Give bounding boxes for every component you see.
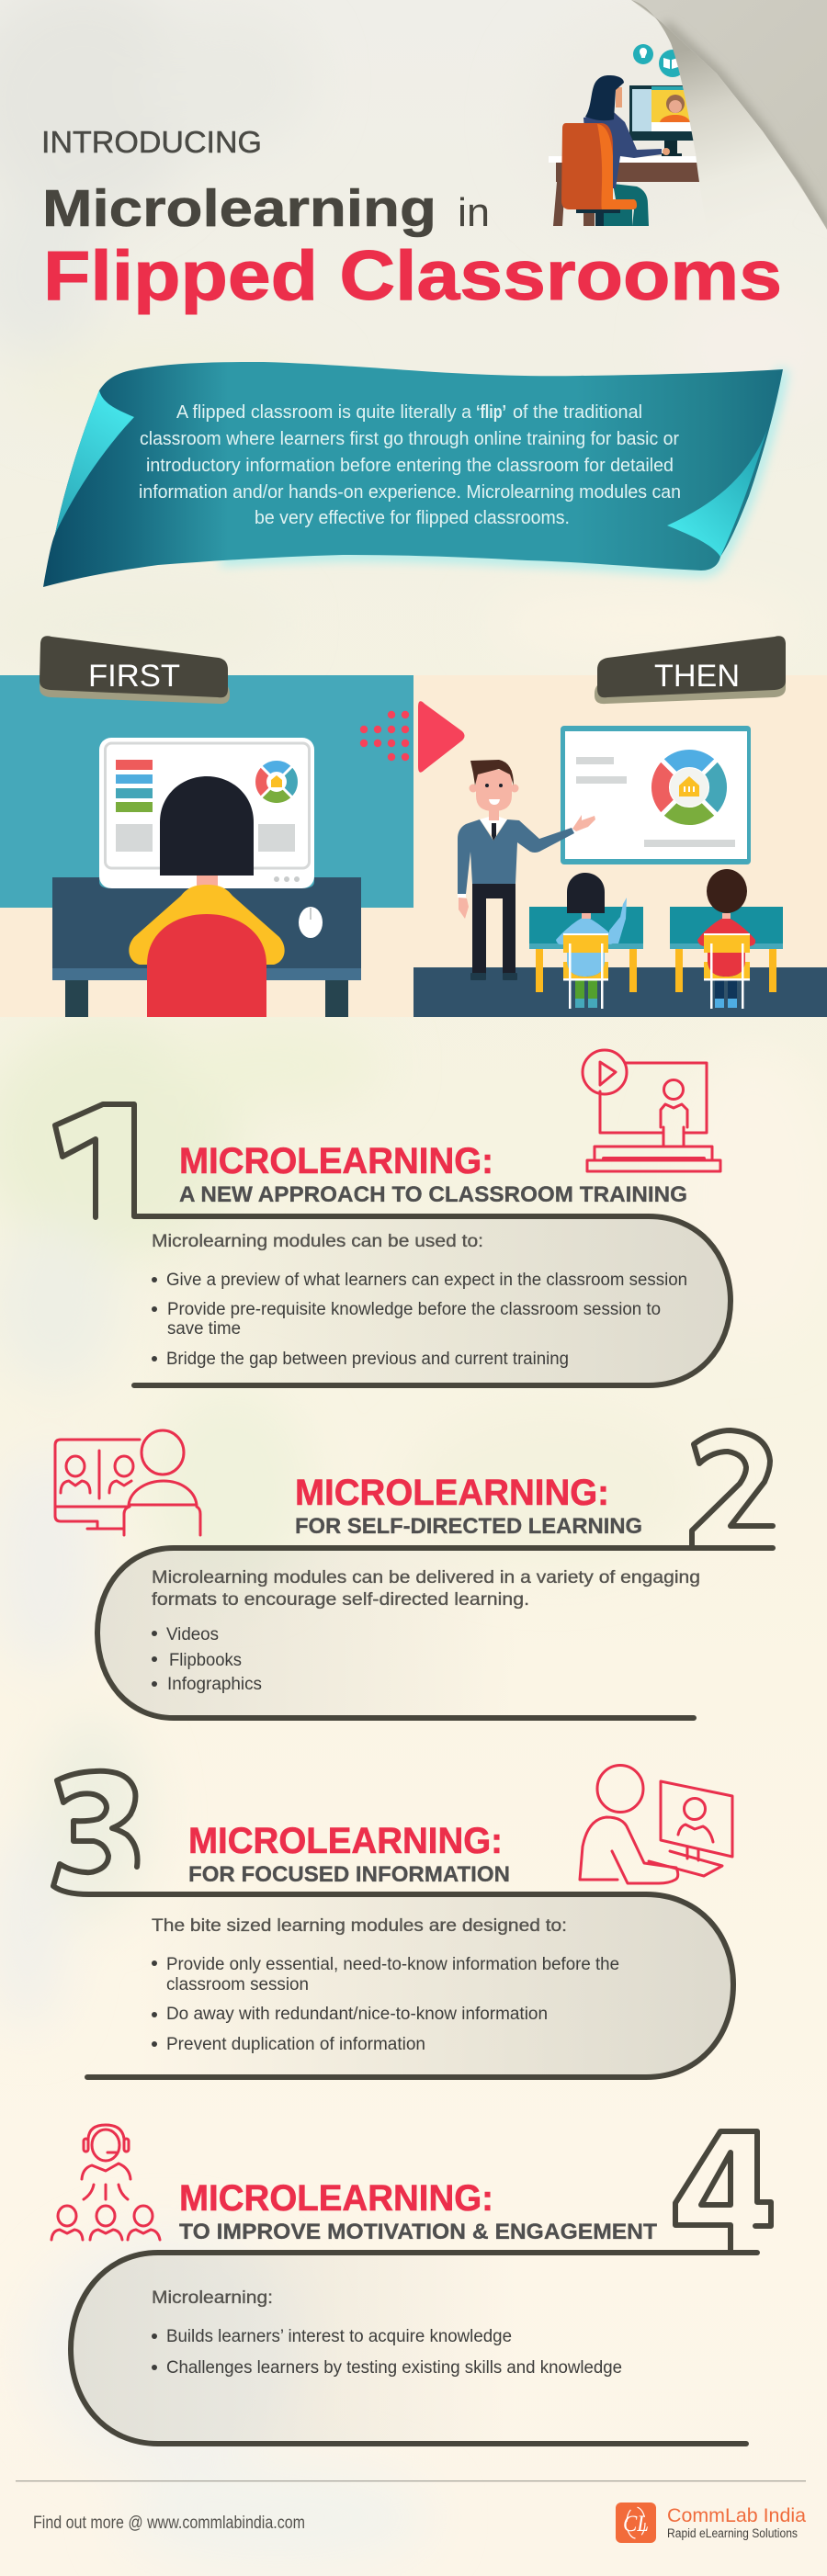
logo xyxy=(616,2503,806,2543)
tag: then xyxy=(595,636,786,704)
icon: video lesson xyxy=(583,1050,720,1171)
text 2: formats to encourage self-directed learning. xyxy=(152,1589,529,1610)
woman xyxy=(583,75,670,226)
ribbon text: classroom where learners first go through online training for basic or xyxy=(140,429,679,449)
whiteboard xyxy=(561,726,751,864)
icon: online class xyxy=(55,1430,200,1535)
title: in: in xyxy=(458,190,490,235)
mouse xyxy=(299,907,323,938)
heading 4: MICROLEARNING: xyxy=(179,2178,493,2219)
icon: instructor and group xyxy=(51,2125,160,2240)
heading 2: MICROLEARNING: xyxy=(295,1473,609,1513)
desk xyxy=(549,156,701,226)
panel: first xyxy=(0,636,414,1017)
heading 3: MICROLEARNING: xyxy=(188,1821,503,1861)
number 4 and outline xyxy=(71,2131,771,2444)
ribbon text: of the traditional xyxy=(513,402,642,423)
panel: section 3 xyxy=(53,1766,733,2077)
number 3 and outline xyxy=(53,1771,733,2077)
heading 4: TO IMPROVE MOTIVATION & ENGAGEMENT xyxy=(179,2220,657,2244)
logo: CommLab India xyxy=(667,2505,806,2526)
text 1: Provide pre-requisite knowledge before the classroom session to xyxy=(167,1300,661,1319)
ribbon left fold xyxy=(55,390,134,534)
text 2 xyxy=(152,1567,700,1694)
ribbon right fold xyxy=(667,429,767,557)
footer link: Find out more @ www.commlabindia.com xyxy=(33,2514,305,2533)
text 2: Videos xyxy=(166,1625,219,1644)
number 1 and outline xyxy=(55,1104,731,1385)
ribbon text xyxy=(139,402,681,528)
tag: first: FIRST xyxy=(88,659,180,694)
text 4: Microlearning: xyxy=(152,2288,273,2308)
panel: section 2 xyxy=(55,1430,773,1718)
heading 2 xyxy=(295,1473,642,1539)
text 3: classroom session xyxy=(166,1975,309,1994)
panel: section 1 xyxy=(55,1050,731,1385)
student 2 xyxy=(697,869,755,1009)
heading 2: FOR SELF-DIRECTED LEARNING xyxy=(295,1514,642,1539)
monitor xyxy=(99,738,314,888)
text 3: Prevent duplication of information xyxy=(166,2035,425,2054)
title xyxy=(41,125,782,315)
title: introducing: INTRODUCING xyxy=(41,125,262,159)
tag: first xyxy=(40,636,230,704)
text 3: Do away with redundant/nice-to-know information xyxy=(166,2005,548,2024)
ribbon text: ‘flip’ xyxy=(476,402,506,423)
text 4: Challenges learners by testing existing skills and knowledge xyxy=(166,2358,622,2378)
ribbon text: A flipped classroom is quite literally a xyxy=(176,402,472,423)
desk 1 xyxy=(529,907,643,992)
ribbon text: be very effective for flipped classrooms. xyxy=(255,508,570,528)
heading 1: MICROLEARNING: xyxy=(179,1141,493,1181)
desk 2 xyxy=(670,907,783,992)
text 2: Infographics xyxy=(167,1675,262,1694)
text 1 xyxy=(152,1231,687,1369)
icon: e-learner xyxy=(580,1766,732,1883)
text 4: Builds learners’ interest to acquire knowledge xyxy=(166,2327,512,2346)
arrow with dots xyxy=(360,701,465,773)
chair xyxy=(561,123,637,226)
tag: then: THEN xyxy=(654,659,740,694)
text 1: Give a preview of what learners can expect in the classroom session xyxy=(166,1271,687,1290)
logo: Rapid eLearning Solutions xyxy=(667,2526,798,2540)
page curl xyxy=(631,0,827,238)
student 1 xyxy=(556,873,627,1009)
ribbon banner xyxy=(43,362,783,587)
heading 1 xyxy=(179,1141,687,1207)
learner from behind xyxy=(129,776,285,1017)
panel: then xyxy=(414,636,827,1017)
text 3: Provide only essential, need-to-know information before the xyxy=(166,1955,619,1974)
ribbon text: information and/or hands-on experience. Microlearning modules can xyxy=(139,482,681,503)
text 1: save time xyxy=(167,1319,241,1339)
text 1: Bridge the gap between previous and current training xyxy=(166,1350,569,1369)
text 3: The bite sized learning modules are designed to: xyxy=(152,1915,567,1936)
text 1: Microlearning modules can be used to: xyxy=(152,1231,483,1251)
heading 1: A NEW APPROACH TO CLASSROOM TRAINING xyxy=(179,1182,687,1207)
number 2 and outline xyxy=(97,1430,773,1718)
text 4 xyxy=(152,2288,622,2378)
title: flipped classrooms: Flipped Classrooms xyxy=(43,237,782,315)
icon: bulb xyxy=(633,44,653,64)
logo: CL xyxy=(623,2512,649,2536)
icon: book xyxy=(659,50,686,77)
heading 3: FOR FOCUSED INFORMATION xyxy=(188,1862,510,1887)
text 2: Flipbooks xyxy=(169,1651,242,1670)
heading 4 xyxy=(179,2178,657,2244)
illustration: woman at computer xyxy=(549,44,701,226)
heading 3 xyxy=(188,1821,510,1887)
large wheel xyxy=(651,749,728,826)
small wheel xyxy=(255,760,299,804)
title: microlearning: Microlearning xyxy=(42,179,436,238)
monitor xyxy=(629,85,695,156)
text 2: Microlearning modules can be delivered in a variety of engaging xyxy=(152,1567,700,1587)
desk xyxy=(52,877,361,1017)
ribbon text: introductory information before entering the classroom for detailed xyxy=(146,456,674,476)
teacher xyxy=(458,760,595,980)
panel: section 4 xyxy=(51,2125,771,2444)
text 3 xyxy=(152,1915,619,2054)
footer xyxy=(16,2480,806,2543)
